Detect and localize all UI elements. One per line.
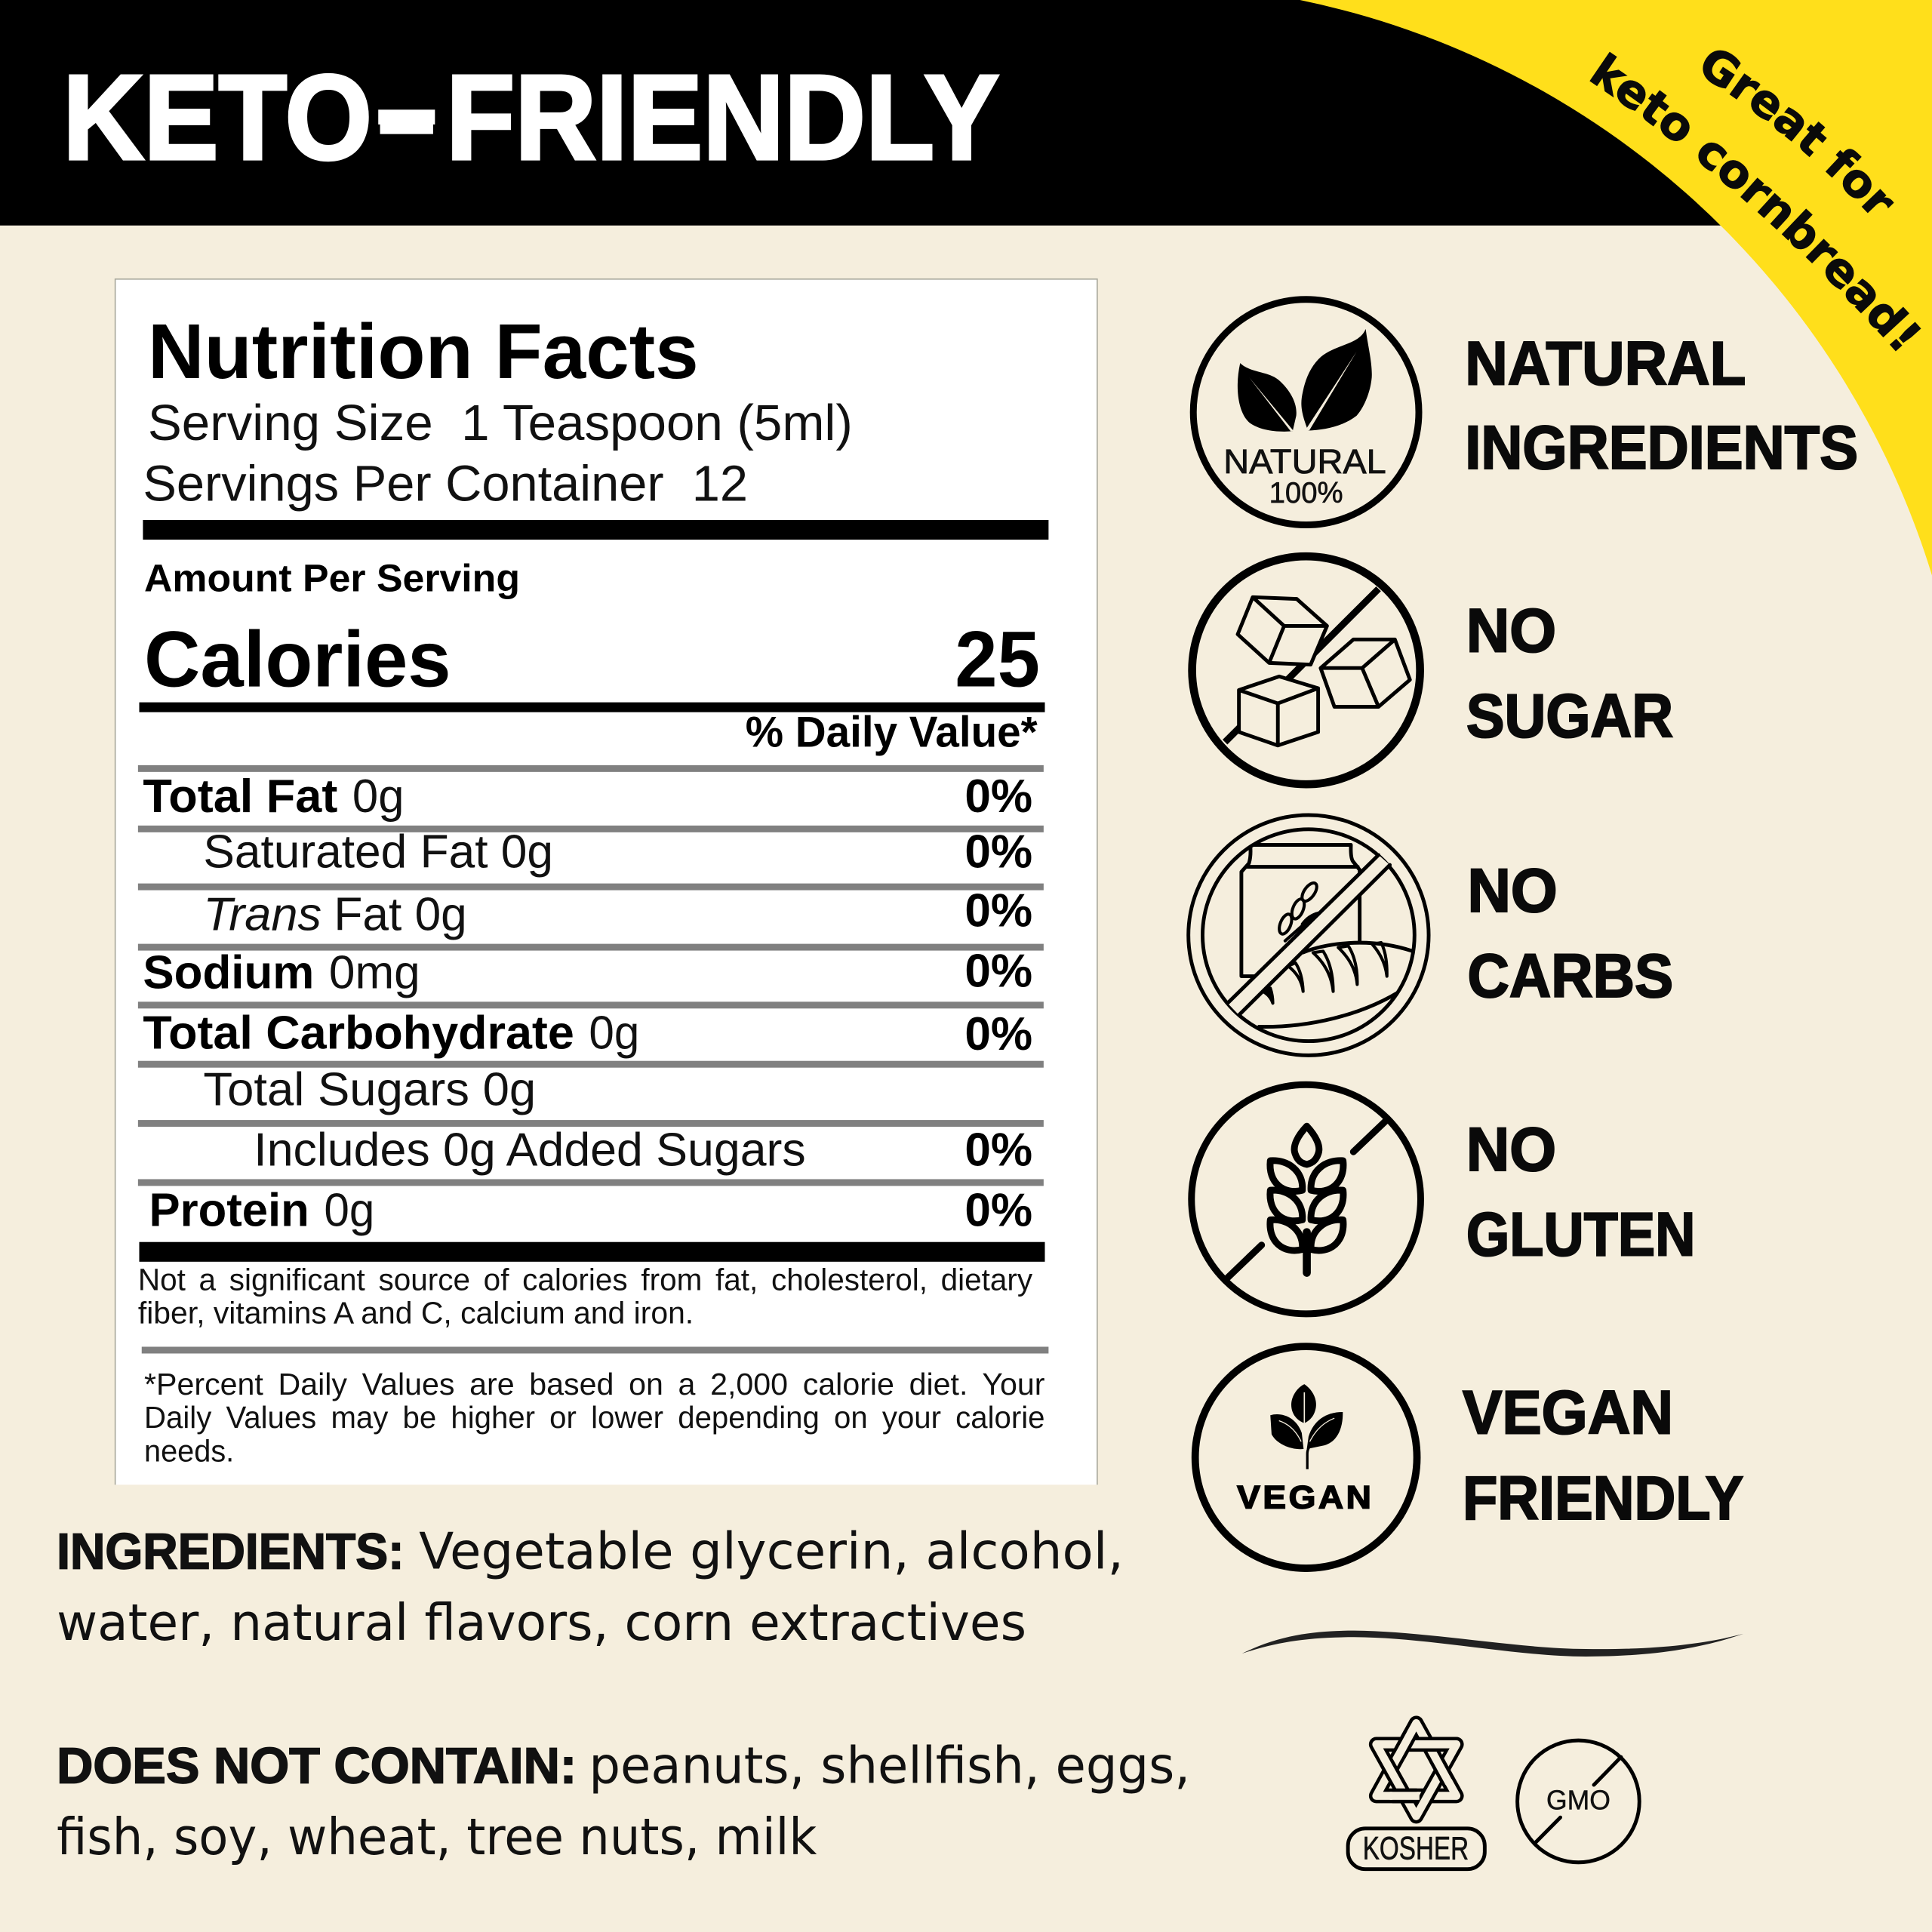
label: no carbs: NO <box>1467 857 1558 925</box>
title: KETO <box>63 50 372 185</box>
does not contain text <box>57 1736 1190 1866</box>
label: natural ingredients: INGREDIENTS <box>1465 414 1858 482</box>
label: no sugar: SUGAR <box>1466 681 1673 750</box>
ingredients text: water, natural flavors, corn extractives <box>57 1593 1026 1652</box>
badge text: keto cornbread: keto cornbread! <box>1589 51 1921 352</box>
daily value heading: % Daily Value* <box>746 708 1038 756</box>
label: vegan friendly: VEGAN <box>1463 1379 1673 1447</box>
label: natural ingredients <box>1465 329 1858 482</box>
footnote: percent daily values: needs. <box>144 1433 234 1468</box>
row: trans fat: Trans <box>203 889 321 941</box>
row: sodium: 0% <box>964 946 1032 998</box>
row: sodium: Sodium <box>143 946 314 998</box>
icon: no sugar <box>1192 556 1420 784</box>
title <box>63 50 999 185</box>
badge text: great for: Great for <box>1703 50 1894 213</box>
row: total carbohydrate: Total Carbohydrate <box>143 1007 574 1059</box>
calories value: 25 <box>955 615 1040 703</box>
label: no carbs: CARBS <box>1467 942 1673 1011</box>
footnote: percent daily values: *Percent Daily Values are based on a 2,000 calorie diet. Your <box>144 1367 1044 1401</box>
row: saturated fat: 0% <box>964 826 1032 878</box>
label: no gluten: GLUTEN <box>1466 1201 1696 1269</box>
ingredients text: INGREDIENTS: <box>57 1523 405 1580</box>
icon: no gmo <box>1518 1740 1639 1863</box>
amount per serving: Amount Per Serving <box>144 557 520 600</box>
label: no gluten <box>1466 1115 1696 1269</box>
label: no sugar: NO <box>1466 597 1556 666</box>
row: trans fat: Fat 0g <box>334 889 467 941</box>
does not contain text: peanuts, shellfish, eggs, <box>589 1736 1190 1795</box>
servings per container: Servings Per Container 12 <box>143 456 748 512</box>
row: total fat: Total Fat <box>143 771 337 823</box>
footnote: percent daily values <box>144 1367 1044 1468</box>
footnote: not a significant source: Not a significant source of calories from fat, cholesterol, dietary <box>138 1262 1033 1297</box>
row: protein: 0g <box>324 1184 374 1236</box>
calories label: Calories <box>144 615 451 703</box>
row: total fat: 0g <box>352 771 405 823</box>
title: – <box>378 50 435 185</box>
icon: natural 100%: NATURAL <box>1223 442 1386 481</box>
label: no gluten: NO <box>1466 1115 1556 1184</box>
footnote: not a significant source: fiber, vitamins A and C, calcium and iron. <box>138 1295 694 1330</box>
icon: kosher: KOSHER <box>1363 1831 1469 1866</box>
row: protein: Protein <box>149 1184 309 1236</box>
icon: no carbs <box>1189 815 1429 1055</box>
row: total fat: 0% <box>964 771 1032 823</box>
icon: natural 100%: 100% <box>1269 477 1343 509</box>
heading: nutrition facts: Nutrition Facts <box>148 308 699 395</box>
icon: natural 100% <box>1193 300 1419 525</box>
row: total carbohydrate: 0% <box>964 1008 1032 1060</box>
ingredients text <box>57 1521 1124 1652</box>
icon: no gluten <box>1192 1084 1420 1314</box>
row: sodium: 0mg <box>329 946 420 998</box>
row: total sugars: Total Sugars 0g <box>203 1063 536 1115</box>
label: vegan friendly: FRIENDLY <box>1463 1464 1743 1533</box>
row: saturated fat <box>203 826 1032 878</box>
decorative swoosh divider <box>1242 1631 1743 1657</box>
row: protein <box>149 1184 1032 1236</box>
label: vegan friendly <box>1463 1379 1743 1533</box>
row: sodium <box>143 946 1032 998</box>
footnote: not a significant source <box>138 1262 1033 1330</box>
row: total fat <box>143 771 1032 823</box>
row: trans fat <box>203 885 1032 941</box>
row: protein: 0% <box>964 1184 1032 1236</box>
panel: nutrition facts <box>115 279 1097 1484</box>
yellow corner badge <box>1300 0 1932 575</box>
icon: no gmo: GMO <box>1546 1785 1611 1816</box>
label: no sugar <box>1466 597 1673 750</box>
does not contain text: fish, soy, wheat, tree nuts, milk <box>57 1807 817 1866</box>
label: natural ingredients: NATURAL <box>1465 329 1746 398</box>
icon: kosher <box>1348 1723 1484 1869</box>
icon: vegan <box>1195 1346 1417 1568</box>
footnote: percent daily values: Daily Values may be higher or lower depending on your calorie <box>144 1400 1044 1435</box>
row: trans fat: 0% <box>964 885 1032 937</box>
row: saturated fat: Saturated Fat 0g <box>203 826 553 878</box>
row: added sugars: 0% <box>964 1124 1032 1176</box>
serving size: Serving Size 1 Teaspoon (5ml) <box>148 395 853 451</box>
header banner <box>0 0 1932 226</box>
does not contain text: DOES NOT CONTAIN: <box>57 1737 577 1794</box>
row: total carbohydrate: 0g <box>589 1007 639 1059</box>
ingredients text: Vegetable glycerin, alcohol, <box>419 1521 1124 1580</box>
row: added sugars: Includes 0g Added Sugars <box>254 1124 806 1176</box>
icon: vegan: VEGAN <box>1237 1479 1374 1515</box>
title: FRIENDLY <box>446 50 999 185</box>
row: total carbohydrate <box>143 1007 1032 1060</box>
label: no carbs <box>1467 857 1673 1011</box>
